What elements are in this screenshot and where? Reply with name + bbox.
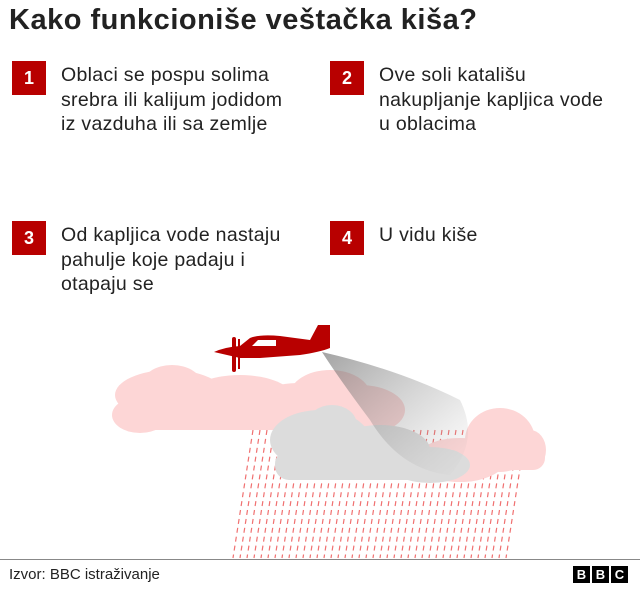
step 2: Ove soli katališu (379, 64, 526, 86)
BBC logo: B (596, 567, 605, 582)
step 1: iz vazduha ili sa zemlje (61, 113, 268, 135)
spray (322, 352, 468, 475)
plane (214, 325, 330, 372)
BBC logo: C (615, 567, 624, 582)
step 3: pahulje koje padaju i (61, 248, 245, 270)
step 1 (12, 61, 282, 135)
title: Kako funkcioniše veštačka kiša? (9, 4, 477, 36)
step 3: 3 (24, 228, 34, 248)
step 1: Oblaci se pospu solima (61, 64, 269, 86)
step 2: u oblacima (379, 113, 476, 135)
source: Izvor: BBC istraživanje (9, 566, 160, 583)
pink cloud right (415, 408, 546, 482)
pink cloud left (112, 365, 405, 435)
step 1: 1 (24, 68, 34, 88)
step 3: otapaju se (61, 273, 154, 295)
step 2 (330, 61, 603, 135)
step 4: 4 (342, 228, 352, 248)
step 2: nakupljanje kapljica vode (379, 88, 603, 110)
step 1: srebra ili kalijum jodidom (61, 88, 282, 110)
step 4: U vidu kiše (379, 224, 478, 246)
step 3 (12, 221, 281, 295)
BBC logo (573, 566, 628, 583)
step 4 (330, 221, 478, 255)
BBC logo: B (577, 567, 586, 582)
step 3: Od kapljica vode nastaju (61, 224, 281, 246)
step 2: 2 (342, 68, 352, 88)
divider (0, 559, 640, 560)
rain (233, 430, 526, 558)
gray cloud (270, 405, 470, 483)
